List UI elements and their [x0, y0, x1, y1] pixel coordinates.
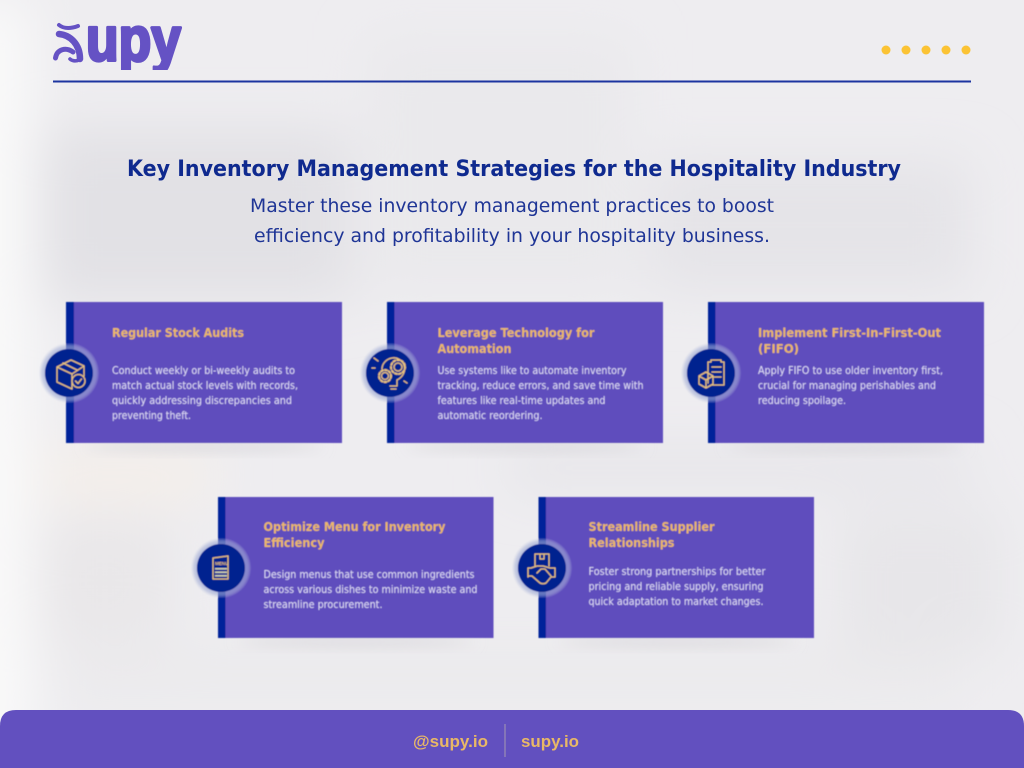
panel: Streamline Supplier Relationships [512, 497, 814, 646]
body text: tracking, reduce errors, and save time with [438, 380, 644, 392]
subtitle [250, 195, 774, 247]
icon: menu: MENU [215, 561, 228, 566]
body text: quick adaptation to market changes. [588, 596, 764, 608]
panel: Leverage Technology for Automation [360, 302, 663, 451]
body text: streamline procurement. [264, 599, 382, 611]
body text [758, 365, 943, 407]
icon: bulb with gears [360, 343, 420, 403]
body text: Use systems like to automate inventory [438, 365, 626, 377]
subtitle: efficiency and profitability in your hospitality business. [254, 225, 770, 247]
icon: logo mark [56, 25, 80, 61]
heading: Regular Stock Audits [112, 325, 244, 340]
body text: preventing theft. [112, 410, 191, 422]
body text: reducing spoilage. [758, 395, 846, 407]
title: Key Inventory Management Strategies for the Hospitality Industry [127, 157, 901, 182]
body text: match actual stock levels with records, [112, 380, 298, 392]
logo wordmark: upy [86, 6, 181, 74]
body text: across various dishes to minimize waste and [264, 584, 478, 596]
icon: handshake with parcel [512, 538, 572, 598]
heading [438, 325, 595, 356]
heading: Streamline Supplier [588, 519, 715, 534]
panel: Optimize Menu [191, 497, 494, 646]
logo [53, 22, 182, 70]
panel: Implement FIFO [681, 302, 984, 451]
heading [264, 519, 446, 550]
body text: features like real-time updates and [438, 395, 606, 407]
footer website: supy.io [521, 732, 579, 751]
body text: automatic reordering. [438, 410, 542, 422]
icon: box with check [39, 343, 99, 403]
heading [588, 519, 715, 550]
body text [438, 365, 644, 422]
icon: menu [191, 538, 251, 598]
footer divider [504, 724, 506, 757]
heading [758, 325, 941, 356]
icon: clipboard with boxes [681, 343, 741, 403]
heading: Relationships [588, 535, 674, 550]
body text [588, 566, 766, 608]
body text [264, 569, 478, 611]
panel: Regular Stock Audits [39, 302, 342, 451]
body text: Foster strong partnerships for better [588, 566, 766, 578]
heading: Leverage Technology for [438, 325, 595, 340]
body text: Conduct weekly or bi-weekly audits to [112, 365, 295, 377]
heading: Implement First-In-First-Out [758, 325, 941, 340]
decorative dots [882, 46, 970, 54]
header rule [53, 80, 971, 82]
heading: Efficiency [264, 535, 324, 550]
subtitle: Master these inventory management practices to boost [250, 195, 774, 217]
body text: Design menus that use common ingredients [264, 569, 474, 581]
heading: Optimize Menu for Inventory [264, 519, 446, 534]
heading: Automation [438, 341, 512, 356]
body text: pricing and reliable supply, ensuring [588, 581, 764, 593]
footer band [0, 710, 1024, 768]
body text: Apply FIFO to use older inventory first, [758, 365, 943, 377]
body text [112, 365, 298, 422]
footer handle: @supy.io [413, 732, 488, 751]
body text: crucial for managing perishables and [758, 380, 936, 392]
heading: (FIFO) [758, 341, 799, 356]
body text: quickly addressing discrepancies and [112, 395, 292, 407]
